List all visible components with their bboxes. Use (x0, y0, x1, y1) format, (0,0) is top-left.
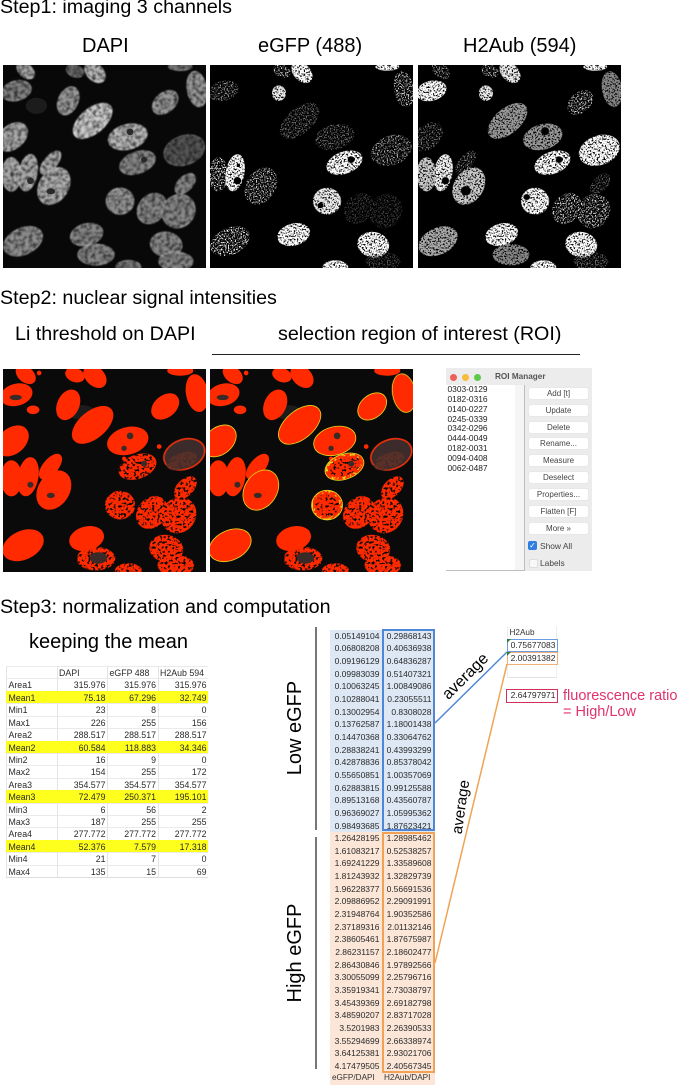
column footer: eGFP/DAPI: eGFP/DAPI (332, 1073, 375, 1082)
button: Measure: Measure (543, 456, 574, 465)
table: ROI measurements: 315.976 (175, 680, 206, 690)
ratio result: 2.64797971 (511, 690, 556, 700)
table: ROI measurements: 8 (151, 705, 156, 715)
table: ROI measurements: Max3 (8, 817, 30, 827)
button: Rename (529, 438, 588, 449)
table: ROI measurements: 15 (146, 867, 156, 877)
button: Deselect: Deselect (543, 473, 574, 482)
table: ROI measurements: 0 (202, 854, 206, 864)
average: low eGFP: 0.75677083 (511, 640, 556, 650)
table: ROI measurements: 2 (202, 805, 206, 815)
table: ROI measurements: 277.772 (124, 829, 156, 839)
table: ROI measurements: 354.577 (74, 780, 106, 790)
button: Properties (529, 489, 588, 500)
checkbox: Labels (529, 559, 538, 568)
table: ROI measurements: Mean1 (8, 693, 35, 703)
table: ROI measurements: H2Aub 594 (160, 668, 204, 678)
table: ROI measurements: Min1 (8, 705, 28, 715)
table: ROI measurements: Mean2 (8, 743, 35, 753)
table: ROI measurements: Area1 (8, 680, 32, 690)
bracket: High eGFP (315, 837, 316, 1069)
table: ROI measurements: 315.976 (124, 680, 156, 690)
table: ROI measurements: 69 (197, 867, 206, 877)
table: ROI measurements: 17.318 (180, 842, 206, 852)
table: ROI measurements: DAPI (59, 668, 80, 678)
table: ROI measurements: 0 (202, 705, 206, 715)
label: Li threshold on DAPI: Li threshold on DAPI (15, 322, 196, 344)
table: ROI measurements: Min3 (8, 805, 28, 815)
table: ROI measurements: Max1 (8, 718, 30, 728)
heading: step 3: Step3: normalization and computation (0, 596, 331, 618)
table: ROI measurements (6, 666, 208, 878)
button: Update: Update (546, 406, 571, 415)
table: ROI measurements: Max2 (8, 767, 30, 777)
table: ROI measurements: 0 (202, 755, 206, 765)
average: low eGFP (506, 639, 558, 652)
button: Measure (529, 455, 588, 466)
table: ROI measurements: 288.517 (175, 730, 206, 740)
table: ROI measurements: 277.772 (74, 829, 106, 839)
button: Delete: Delete (547, 423, 570, 432)
window title: ROI Manager (495, 372, 546, 381)
label: average orange: average (449, 779, 473, 835)
mini table: H2Aub averages (507, 626, 557, 678)
button: More (529, 523, 588, 534)
table: ROI measurements: eGFP 488 (110, 668, 149, 678)
highlight box: Low eGFP H2Aub/DAPI (382, 629, 435, 831)
table: ROI measurements: 250.371 (124, 792, 156, 802)
table: ROI measurements: 135 (91, 867, 106, 877)
background: Low eGFP rows (330, 630, 435, 832)
checkbox: Show All: ✓ (529, 541, 536, 550)
bracket: Low eGFP (315, 627, 316, 830)
label: fluorescence ratio: fluorescence ratio = High/Low (563, 688, 677, 720)
table: ROI measurements: 56 (146, 805, 156, 815)
table: ROI measurements: Mean4 (8, 842, 35, 852)
table: ROI measurements: 315.976 (74, 680, 106, 690)
table: ROI measurements: Area2 (8, 730, 32, 740)
marker: green cell corner 1 (507, 639, 511, 643)
column footer: H2Aub/DAPI: H2Aub/DAPI (384, 1073, 430, 1082)
table: ROI measurements: 187 (91, 817, 106, 827)
table: ROI measurements: 7 (151, 854, 156, 864)
close button (450, 374, 457, 381)
heading: step 2: Step2: nuclear signal intensities (0, 286, 277, 308)
button: More: More » (546, 524, 571, 533)
button: Properties: Properties... (537, 490, 580, 499)
minimise button (462, 374, 469, 381)
table: ROI measurements: 9 (151, 755, 156, 765)
table: ROI measurements: 32.749 (180, 693, 206, 703)
table: ROI measurements: Min4 (8, 854, 28, 864)
button: Flatten: Flatten [F] (540, 507, 576, 516)
table: ROI measurements: Mean3 (8, 792, 35, 802)
table: ROI measurements: 156 (192, 718, 206, 728)
highlight box: High eGFP H2Aub/DAPI (382, 832, 435, 1073)
label: selection region of interest: selection region of interest (ROI) (278, 322, 561, 344)
label: average blue: average (439, 650, 492, 703)
image: eGFP channel nuclei (210, 65, 413, 268)
table: ROI measurements: 52.376 (79, 842, 106, 852)
table: ROI measurements: 21 (96, 854, 106, 864)
table: ROI measurements: 255 (141, 718, 156, 728)
table: ROI measurements: Area4 (8, 829, 32, 839)
table: ROI measurements: 67.296 (129, 693, 156, 703)
maximise button (474, 374, 481, 381)
label: Labels: Labels (540, 558, 565, 568)
column: Low eGFP H2Aub/DAPI values: 0.29868143 0.40636938 0.64836287 0.51407321 1.00849086 0.23055511 0.8308028 1.18001438 0.33064762 0.43993299 0.85378042 1.00357069 0.99125588 0.43560787 1.05995362 1.87623421 (387, 630, 432, 831)
label: keeping the mean: keeping the mean (29, 631, 188, 653)
label: H2Aub (594): H2Aub (594) (463, 35, 576, 57)
label: Show All: Show All (540, 541, 572, 551)
column: High eGFP eGFP/DAPI values: 1.26428195 1.61083217 1.69241229 1.81243932 1.96228377 2.09886952 2.31948764 2.37189316 2.38605461 2.86231157 2.86430846 3.30055099 3.35919341 3.45439369 3.48590207 3.5201983 3.55294699 3.64125381 4.17479505 (335, 833, 380, 1071)
table: ROI measurements: 354.577 (124, 780, 156, 790)
image: DAPI channel nuclei (3, 65, 206, 268)
table: ROI measurements: 23 (96, 705, 106, 715)
table: ROI measurements: 255 (141, 767, 156, 777)
average: high eGFP (506, 652, 558, 665)
button: Delete (529, 422, 588, 433)
table: ROI measurements: 7.579 (134, 842, 156, 852)
button: Update (529, 405, 588, 416)
table: ROI measurements: 255 (141, 817, 156, 827)
image: red mask with yellow ROI outlines (46, 127, 562, 572)
average: high eGFP: 2.00391382 (511, 653, 556, 663)
table: ROI measurements: 72.479 (79, 792, 106, 802)
connector: orange average line (435, 664, 507, 963)
button: Flatten (529, 506, 588, 517)
table: ROI measurements: 277.772 (175, 829, 206, 839)
mini table header: H2Aub (510, 628, 535, 637)
table: ROI measurements: 195.101 (175, 792, 206, 802)
label: eGFP (488): eGFP (488) (258, 35, 362, 57)
ratio result (506, 689, 558, 703)
table: ROI measurements: Min2 (8, 755, 28, 765)
column: High eGFP H2Aub/DAPI values: 1.28985462 0.52538257 1.33589608 1.32829739 0.56691536 2.29091991 1.90352586 2.01132146 1.87675987 2.18602477 1.97892566 2.25796716 2.73038797 2.69182798 2.83717028 2.26390533 2.66338974 2.93021706 2.40567345 (387, 833, 432, 1071)
button: Rename: Rename... (540, 439, 577, 448)
table: ROI measurements: 75.18 (83, 693, 106, 703)
connector: blue average line (435, 652, 507, 723)
table: ROI measurements: 172 (192, 767, 206, 777)
button: Add (529, 388, 588, 399)
table: ROI measurements: 288.517 (74, 730, 106, 740)
background: High eGFP rows (330, 832, 435, 1085)
table: ROI measurements: 6 (101, 805, 106, 815)
list scrollbar strip (515, 385, 525, 571)
table: ROI measurements: Area3 (8, 780, 32, 790)
image: Li threshold red mask (3, 127, 562, 572)
image: H2Aub channel nuclei (26, 65, 621, 417)
label: High eGFP: High eGFP (284, 904, 306, 1002)
button: Deselect (529, 472, 588, 483)
table: ROI measurements: 354.577 (175, 780, 206, 790)
label: DAPI: DAPI (82, 35, 129, 57)
table: ROI measurements: 60.584 (79, 743, 106, 753)
panel: ROI Manager window (446, 368, 592, 571)
table: ROI measurements: 16 (96, 755, 106, 765)
table: ROI measurements: 226 (91, 718, 106, 728)
ROI list (446, 385, 515, 571)
table: ROI measurements: 255 (192, 817, 206, 827)
column: Low eGFP eGFP/DAPI values: 0.05149104 0.06808208 0.09196129 0.09983039 0.10063245 0.10288041 0.13002954 0.13762587 0.14470368 0.28838241 0.42878836 0.55650851 0.62883815 0.89513168 0.96369027 0.98493685 (335, 630, 380, 831)
table: ROI measurements: 34.346 (180, 743, 206, 753)
ROI list: 0303-0129 0182-0316 0140-0227 0245-0339 0342-0296 0444-0049 0182-0031 0094-0408 0062-0487 (448, 384, 488, 473)
table: ROI measurements: 118.883 (125, 743, 156, 753)
marker: green cell corner 2 (507, 652, 511, 656)
label: Low eGFP: Low eGFP (284, 681, 306, 775)
divider above ROI images (212, 354, 580, 355)
button: Add: Add [t] (547, 389, 570, 398)
table: ROI measurements: 154 (91, 767, 106, 777)
table: ROI measurements: Max4 (8, 867, 30, 877)
table: ROI measurements: 288.517 (124, 730, 156, 740)
